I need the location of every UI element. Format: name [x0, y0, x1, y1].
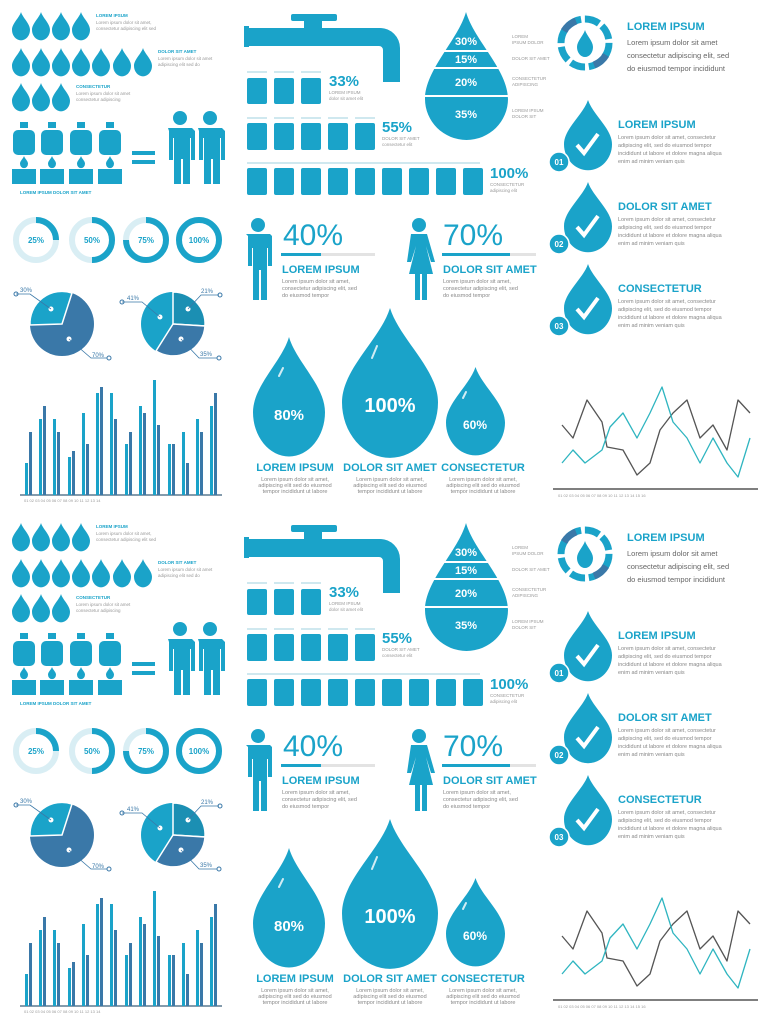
glasses percentages: CONSECTETUR: [490, 693, 525, 698]
pie charts: 30%: [20, 799, 33, 805]
text: lorem ipsum header: consectetur adipiscing elit, sed: [627, 51, 729, 60]
bottom half infographic: 75%: [138, 747, 154, 756]
text: lorem ipsum header: [627, 21, 729, 73]
big drops with percentages: 60%: [463, 418, 487, 432]
text: lorem ipsum header: Lorem ipsum dolor sit amet: [627, 38, 718, 47]
pie charts: [14, 799, 222, 871]
big drops with percentages: 100%: [364, 906, 416, 928]
checklist item 01: incididunt ut labore et dolore magna aliqua: [618, 662, 723, 668]
drop row labels: DOLOR SIT AMET: [158, 49, 197, 54]
drop row labels: LOREM IPSUM: [96, 524, 128, 529]
bottom half infographic: 50%: [84, 747, 100, 756]
layered drop chart: DOLOR SIT AMET: [512, 56, 550, 61]
glasses percentages: 55%: [382, 119, 412, 136]
checklist item 02: adipiscing elit, sed do eiusmod tempor: [618, 736, 712, 742]
big drops with percentages: Lorem ipsum dolor sit amet,: [261, 988, 329, 994]
man 40%: 40%: [283, 730, 343, 763]
big drops with percentages: adipiscing elit sed do eiusmod: [446, 483, 520, 489]
checklist item 02: [549, 182, 723, 254]
checklist item 02: enim ad minim veniam quis: [618, 241, 685, 247]
drop row labels: Lorem ipsum dolor sit amet,: [96, 20, 152, 25]
man 40%: consectetur adipiscing elit, sed: [282, 286, 357, 292]
drop row labels: adipiscing elit sed do: [158, 573, 200, 578]
glasses percentages: 33%: [329, 584, 359, 601]
checklist item 03: [549, 775, 723, 847]
drop row labels: Lorem ipsum dolor sit amet: [158, 56, 213, 61]
layered drop chart: IPSUM DOLOR: [512, 551, 544, 556]
man 40%: consectetur adipiscing elit, sed: [282, 797, 357, 803]
big drops with percentages: CONSECTETUR: [441, 973, 525, 985]
pie charts: 41%: [127, 807, 140, 813]
glasses percentages: CONSECTETUR: [490, 182, 525, 187]
checklist item 01: 01: [555, 669, 564, 678]
bar chart: [20, 891, 222, 1014]
man 40%: do eiusmod tempor: [282, 804, 329, 810]
checklist item 02: incididunt ut labore et dolore magna aliqua: [618, 744, 723, 750]
drop row labels: Lorem ipsum dolor sit amet: [158, 567, 213, 572]
checklist item 01: [549, 611, 723, 683]
woman 70%: [407, 729, 537, 811]
icon: segmented ring: [561, 530, 609, 578]
layered drop chart: LOREM IPSUM: [512, 619, 544, 624]
layered drop chart: 30%: [455, 36, 477, 48]
big drops with percentages: adipiscing elit sed do eiusmod: [446, 994, 520, 1000]
woman 70%: DOLOR SIT AMET: [443, 775, 537, 787]
drop row labels: Lorem ipsum dolor sit amet,: [96, 531, 152, 536]
layered drop chart: 35%: [455, 109, 477, 121]
checklist item 03: CONSECTETUR: [618, 794, 702, 806]
glasses percentages: LOREM IPSUM: [329, 601, 361, 606]
pie charts: [14, 288, 222, 360]
big drops with percentages: adipiscing elit sed do eiusmod: [258, 483, 332, 489]
big drops with percentages: Lorem ipsum dolor sit amet,: [449, 477, 517, 483]
woman 70%: do eiusmod tempor: [443, 804, 490, 810]
man 40%: LOREM IPSUM: [282, 264, 360, 276]
row 3 drops: [12, 594, 70, 622]
text: lorem ipsum header: consectetur adipiscing elit, sed: [627, 562, 729, 571]
checklist item 02: adipiscing elit, sed do eiusmod tempor: [618, 225, 712, 231]
drop row labels: consectetur adipiscing elit sed: [96, 26, 157, 31]
big drops with percentages: CONSECTETUR: [441, 462, 525, 474]
pie charts: 70%: [92, 353, 105, 359]
woman 70%: Lorem ipsum dolor sit amet,: [443, 279, 511, 285]
pie charts: 21%: [201, 289, 214, 295]
man 40%: LOREM IPSUM: [282, 775, 360, 787]
layered drop chart: 15%: [455, 565, 477, 577]
checklist item 02: Lorem ipsum dolor sit amet, consectetur: [618, 217, 716, 223]
man 40%: [246, 218, 375, 300]
bottom half infographic: LOREM IPSUM DOLOR SIT AMET: [20, 701, 92, 706]
layered drop chart: DOLOR SIT: [512, 114, 537, 119]
layered drop chart: ADIPISCING: [512, 82, 539, 87]
glasses percentages: 100%: [490, 676, 528, 693]
glasses percentages: consectetur elit: [382, 653, 413, 658]
big drops with percentages: [253, 819, 525, 1006]
panel: drop rows: [12, 523, 152, 622]
checklist item 03: [549, 264, 723, 336]
layered drop chart: IPSUM DOLOR: [512, 40, 544, 45]
checklist item 02: [549, 693, 723, 765]
bottles equals people: [12, 111, 225, 184]
checklist item 02: incididunt ut labore et dolore magna aliqua: [618, 233, 723, 239]
layered drop chart: 20%: [455, 77, 477, 89]
pie charts: 30%: [20, 288, 33, 294]
row 2 drops: [12, 48, 152, 76]
top half infographic: 25%: [28, 236, 44, 245]
big drops with percentages: DOLOR SIT AMET: [343, 462, 437, 474]
layered drop chart: [420, 10, 550, 142]
layered drop chart: DOLOR SIT AMET: [512, 567, 550, 572]
glasses percentages: 33%: [329, 73, 359, 90]
line chart: 01 02 03 04 05 06 07 08 09 10 11 12 13 14 15 16: [558, 493, 646, 498]
glasses rows: [247, 582, 483, 706]
big drops with percentages: adipiscing elit sed do eiusmod: [353, 994, 427, 1000]
checklist item 01: adipiscing elit, sed do eiusmod tempor: [618, 143, 712, 149]
checklist item 03: CONSECTETUR: [618, 283, 702, 295]
bar chart: [20, 380, 222, 503]
row 2 drops: [12, 559, 152, 587]
row 1 drops: [12, 523, 90, 551]
glasses percentages: adipiscing elit: [490, 188, 518, 193]
checklist item 01: [549, 100, 723, 172]
checklist item 03: adipiscing elit, sed do eiusmod tempor: [618, 818, 712, 824]
layered drop chart: 35%: [455, 620, 477, 632]
donut charts: [16, 731, 219, 771]
checklist item 02: 02: [555, 240, 564, 249]
big drops with percentages: LOREM IPSUM: [256, 462, 334, 474]
row 3 drops: [12, 83, 70, 111]
layered drop chart: LOREM: [512, 34, 528, 39]
text: lorem ipsum header: do eiusmod tempor incididunt: [627, 64, 726, 73]
checklist item 03: enim ad minim veniam quis: [618, 323, 685, 329]
checklist item 01: adipiscing elit, sed do eiusmod tempor: [618, 654, 712, 660]
checklist item 02: Lorem ipsum dolor sit amet, consectetur: [618, 728, 716, 734]
big drops with percentages: 80%: [274, 918, 304, 935]
drop row labels: consectetur adipiscing: [76, 97, 121, 102]
checklist item 01: LOREM IPSUM: [618, 119, 696, 131]
layered drop chart: LOREM IPSUM: [512, 108, 544, 113]
layered drop chart: 30%: [455, 547, 477, 559]
checklist item 02: enim ad minim veniam quis: [618, 752, 685, 758]
woman 70%: consectetur adipiscing elit, sed: [443, 286, 518, 292]
drop row labels: consectetur adipiscing elit sed: [96, 537, 157, 542]
big drops with percentages: Lorem ipsum dolor sit amet,: [261, 477, 329, 483]
bar chart: 01 02 03 04 05 06 07 08 09 10 11 12 13 14: [24, 1009, 101, 1014]
layered drop chart: ADIPISCING: [512, 593, 539, 598]
drop row labels: CONSECTETUR: [76, 595, 111, 600]
icon: tap: [244, 525, 400, 593]
top half infographic: 75%: [138, 236, 154, 245]
text: lorem ipsum header: Lorem ipsum dolor sit amet: [627, 549, 718, 558]
checklist item 01: enim ad minim veniam quis: [618, 670, 685, 676]
pie charts: 35%: [200, 863, 213, 869]
line chart: [553, 898, 758, 1009]
text: lorem ipsum header: [627, 532, 729, 584]
glasses percentages: DOLOR SIT AMET: [382, 136, 420, 141]
checklist item 03: 03: [555, 833, 564, 842]
glasses percentages: adipiscing elit: [490, 699, 518, 704]
drop row labels: CONSECTETUR: [76, 84, 111, 89]
pie charts: 41%: [127, 296, 140, 302]
man 40%: Lorem ipsum dolor sit amet,: [282, 790, 350, 796]
glasses percentages: dolor sit amet elit: [329, 607, 364, 612]
checklist item 01: LOREM IPSUM: [618, 630, 696, 642]
woman 70%: Lorem ipsum dolor sit amet,: [443, 790, 511, 796]
woman 70%: [407, 218, 537, 300]
man 40%: do eiusmod tempor: [282, 293, 329, 299]
big drops with percentages: Lorem ipsum dolor sit amet,: [449, 988, 517, 994]
drop row labels: Lorem ipsum dolor sit amet: [76, 602, 131, 607]
glasses rows: [247, 71, 483, 195]
glasses percentages: [329, 73, 528, 193]
glasses percentages: 55%: [382, 630, 412, 647]
text: lorem ipsum header: LOREM IPSUM: [627, 532, 705, 544]
drop row labels: [76, 524, 213, 613]
icon: segmented ring: [561, 19, 609, 67]
drop row labels: adipiscing elit sed do: [158, 62, 200, 67]
bar chart: 01 02 03 04 05 06 07 08 09 10 11 12 13 14: [24, 498, 101, 503]
woman 70%: do eiusmod tempor: [443, 293, 490, 299]
checklist item 01: incididunt ut labore et dolore magna aliqua: [618, 151, 723, 157]
woman 70%: 70%: [443, 219, 503, 252]
man 40%: [246, 729, 375, 811]
bottom half infographic: 100%: [189, 747, 209, 756]
donut charts: [16, 220, 219, 260]
drop row labels: DOLOR SIT AMET: [158, 560, 197, 565]
layered drop chart: CONSECTETUR: [512, 587, 547, 592]
layered drop chart: LOREM: [512, 545, 528, 550]
checklist item 01: Lorem ipsum dolor sit amet, consectetur: [618, 646, 716, 652]
checklist item 03: incididunt ut labore et dolore magna aliqua: [618, 826, 723, 832]
big drops with percentages: tempor incididunt ut labore: [358, 489, 422, 495]
checklist item 02: 02: [555, 751, 564, 760]
checklist item 01: enim ad minim veniam quis: [618, 159, 685, 165]
layered drop chart: 15%: [455, 54, 477, 66]
big drops with percentages: 60%: [463, 929, 487, 943]
big drops with percentages: tempor incididunt ut labore: [451, 489, 515, 495]
big drops with percentages: tempor incididunt ut labore: [263, 1000, 327, 1006]
glasses percentages: consectetur elit: [382, 142, 413, 147]
panel: drop rows: [12, 12, 152, 111]
top half infographic: 100%: [189, 236, 209, 245]
text: lorem ipsum header: LOREM IPSUM: [627, 21, 705, 33]
big drops with percentages: tempor incididunt ut labore: [451, 1000, 515, 1006]
big drops with percentages: tempor incididunt ut labore: [358, 1000, 422, 1006]
checklist item 01: 01: [555, 158, 564, 167]
glasses percentages: dolor sit amet elit: [329, 96, 364, 101]
big drops with percentages: adipiscing elit sed do eiusmod: [258, 994, 332, 1000]
checklist item 02: DOLOR SIT AMET: [618, 712, 712, 724]
man 40%: 40%: [283, 219, 343, 252]
big drops with percentages: adipiscing elit sed do eiusmod: [353, 483, 427, 489]
layered drop chart: 20%: [455, 588, 477, 600]
glasses percentages: [329, 584, 528, 704]
layered drop chart: DOLOR SIT: [512, 625, 537, 630]
drop row labels: LOREM IPSUM: [96, 13, 128, 18]
big drops with percentages: 100%: [364, 395, 416, 417]
big drops with percentages: tempor incididunt ut labore: [263, 489, 327, 495]
bottom half infographic: 25%: [28, 747, 44, 756]
icon: tap: [244, 14, 400, 82]
big drops with percentages: [253, 308, 525, 495]
top half infographic: LOREM IPSUM DOLOR SIT AMET: [20, 190, 92, 195]
big drops with percentages: Lorem ipsum dolor sit amet,: [356, 477, 424, 483]
top half infographic: 50%: [84, 236, 100, 245]
drop row labels: Lorem ipsum dolor sit amet: [76, 91, 131, 96]
woman 70%: 70%: [443, 730, 503, 763]
drop row labels: consectetur adipiscing: [76, 608, 121, 613]
pie charts: 21%: [201, 800, 214, 806]
man 40%: Lorem ipsum dolor sit amet,: [282, 279, 350, 285]
big drops with percentages: 80%: [274, 407, 304, 424]
checklist item 01: Lorem ipsum dolor sit amet, consectetur: [618, 135, 716, 141]
layered drop chart: [420, 521, 550, 653]
layered drop chart: CONSECTETUR: [512, 76, 547, 81]
bottles equals people: [12, 622, 225, 695]
big drops with percentages: LOREM IPSUM: [256, 973, 334, 985]
drop row labels: [76, 13, 213, 102]
checklist item 03: enim ad minim veniam quis: [618, 834, 685, 840]
checklist item 03: adipiscing elit, sed do eiusmod tempor: [618, 307, 712, 313]
row 1 drops: [12, 12, 90, 40]
glasses percentages: LOREM IPSUM: [329, 90, 361, 95]
bottom half infographic: [12, 523, 758, 1014]
big drops with percentages: Lorem ipsum dolor sit amet,: [356, 988, 424, 994]
glasses percentages: DOLOR SIT AMET: [382, 647, 420, 652]
pie charts: 35%: [200, 352, 213, 358]
checklist item 02: DOLOR SIT AMET: [618, 201, 712, 213]
text: lorem ipsum header: do eiusmod tempor incididunt: [627, 575, 726, 584]
big drops with percentages: DOLOR SIT AMET: [343, 973, 437, 985]
line chart: [553, 387, 758, 498]
woman 70%: consectetur adipiscing elit, sed: [443, 797, 518, 803]
checklist item 03: Lorem ipsum dolor sit amet, consectetur: [618, 810, 716, 816]
woman 70%: DOLOR SIT AMET: [443, 264, 537, 276]
glasses percentages: 100%: [490, 165, 528, 182]
pie charts: 70%: [92, 864, 105, 870]
checklist item 03: incididunt ut labore et dolore magna aliqua: [618, 315, 723, 321]
top half infographic: [12, 12, 758, 503]
line chart: 01 02 03 04 05 06 07 08 09 10 11 12 13 14 15 16: [558, 1004, 646, 1009]
checklist item 03: 03: [555, 322, 564, 331]
checklist item 03: Lorem ipsum dolor sit amet, consectetur: [618, 299, 716, 305]
